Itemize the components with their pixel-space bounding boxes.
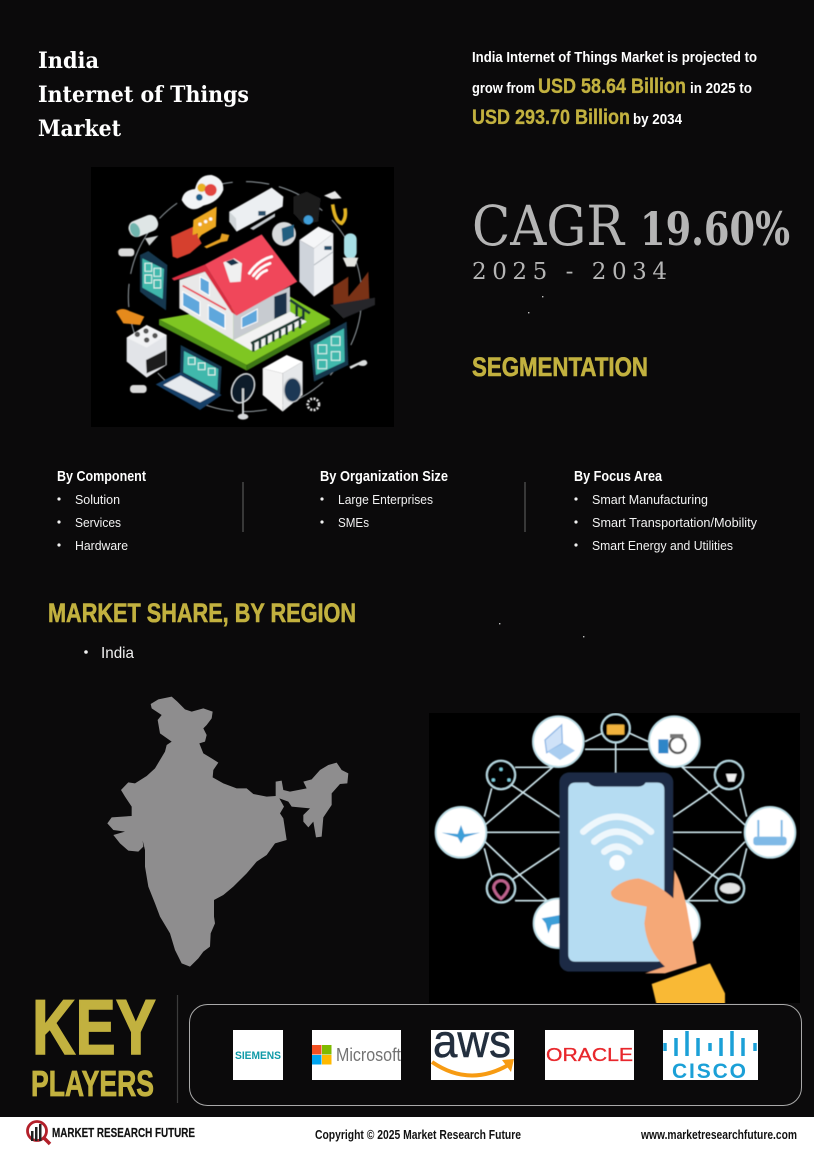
segment: by organization size: By Organization Size — [320, 468, 448, 485]
coffee maker — [293, 192, 321, 224]
hero illustration: smart home — [91, 167, 394, 427]
logo: Oracle — [545, 1030, 634, 1080]
lock icons — [118, 248, 134, 256]
segment: by organization size — [320, 468, 448, 530]
footer — [0, 1117, 814, 1150]
speech bubbles — [171, 227, 202, 258]
segment: by component — [57, 468, 146, 553]
stove — [127, 325, 167, 378]
segment: by organization size: Large Enterprises — [338, 492, 433, 507]
projection text: grow from — [472, 80, 535, 97]
segment: by component: Hardware — [75, 538, 128, 553]
air conditioner — [229, 188, 283, 232]
network ring — [128, 182, 362, 412]
segment: by focus area — [574, 468, 757, 553]
platform — [159, 297, 330, 365]
logo: AWS: aws — [433, 1015, 511, 1067]
key players label: KEY — [32, 984, 156, 1071]
key players label: PLAYERS — [31, 1063, 154, 1104]
network lines — [484, 733, 747, 907]
fan — [227, 370, 259, 407]
logo: Oracle: ORACLE — [546, 1045, 633, 1065]
CAGR — [472, 194, 790, 285]
laptop — [180, 345, 222, 395]
device icons — [607, 725, 624, 735]
logo: Microsoft — [312, 1030, 401, 1080]
market share heading: MARKET SHARE, BY REGION — [48, 598, 356, 628]
washing machine — [263, 355, 303, 373]
projection text — [472, 49, 757, 129]
tablet right — [310, 322, 348, 382]
footer logo — [28, 1122, 195, 1144]
illustration: connected phone — [429, 713, 800, 1005]
logo: Siemens — [233, 1030, 283, 1080]
region list: India — [101, 645, 134, 662]
projection text: by 2034 — [633, 111, 683, 128]
logo: Microsoft: Microsoft — [336, 1045, 401, 1065]
cloud with gears — [182, 175, 223, 209]
fridge — [299, 227, 333, 248]
wifi symbol — [583, 817, 651, 852]
logo: Siemens: SIEMENS — [235, 1050, 281, 1062]
CAGR: 2025 - 2034 — [472, 259, 667, 285]
segment: by focus area: Smart Transportation/Mobility — [592, 515, 757, 530]
key players label — [31, 984, 156, 1104]
segment: by component: By Component — [57, 468, 146, 485]
house — [179, 272, 233, 340]
fence — [251, 300, 310, 352]
logo: Cisco — [663, 1030, 758, 1083]
speck dots — [499, 296, 584, 637]
region list — [84, 645, 134, 662]
hand — [611, 870, 697, 973]
projection text: in 2025 to — [690, 80, 752, 97]
title: India — [38, 48, 99, 74]
light bulb — [344, 233, 357, 258]
map: India — [107, 697, 348, 967]
phone body — [559, 772, 673, 972]
title — [38, 48, 249, 142]
orange lock — [116, 309, 144, 325]
key — [204, 233, 229, 248]
projection text: USD 58.64 Billion — [538, 75, 686, 98]
device circles — [436, 716, 795, 948]
footer logo: MARKET RESEARCH FUTURE — [52, 1126, 195, 1140]
key players panel — [190, 1004, 802, 1106]
projection text: USD 293.70 Billion — [472, 106, 630, 129]
horseshoe — [333, 204, 345, 223]
segmentation heading: SEGMENTATION — [472, 352, 648, 382]
projection text: India Internet of Things Market is projected to — [472, 49, 757, 66]
sleeve — [652, 963, 725, 1005]
segment: by focus area: By Focus Area — [574, 468, 663, 485]
tablet left — [140, 251, 167, 310]
watch — [272, 222, 296, 246]
roof — [172, 264, 237, 316]
copyright: Copyright © 2025 Market Research Future — [315, 1128, 521, 1142]
robot plugs — [333, 272, 369, 307]
logo: Cisco: CISCO — [672, 1060, 746, 1083]
segment: by focus area: Smart Energy and Utilities — [592, 538, 733, 553]
segment: by organization size: SMEs — [338, 515, 369, 530]
CAGR: CAGR — [472, 194, 625, 258]
segment: by focus area: Smart Manufacturing — [592, 492, 708, 507]
segment: by component: Solution — [75, 492, 120, 507]
segment: by component: Services — [75, 515, 121, 530]
small key and gear — [349, 360, 367, 369]
title: Market — [38, 116, 122, 142]
camera — [126, 213, 160, 239]
title: Internet of Things — [38, 82, 249, 108]
